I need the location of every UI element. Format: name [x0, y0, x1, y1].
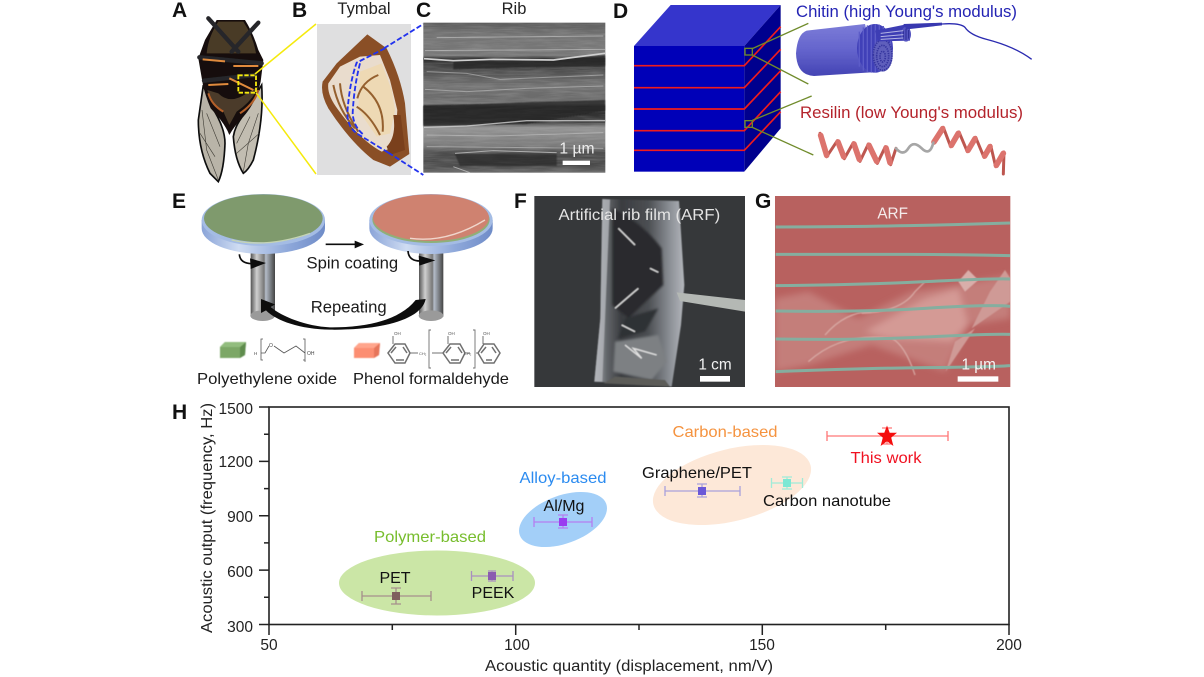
- label: PEEK: PEEK: [472, 585, 515, 602]
- tymbal specimen: [322, 34, 409, 167]
- scale bar: 1 µm: 1 µm: [559, 140, 595, 157]
- group label: carbon-based: Carbon-based: [672, 424, 778, 441]
- icon: cicada body: [198, 18, 263, 135]
- panel labels: D: [613, 0, 628, 23]
- label: phenol formaldehyde: Phenol formaldehyde: [353, 371, 509, 388]
- heading: rib: Rib: [502, 0, 526, 18]
- structural formula: PEO: O: [269, 343, 273, 349]
- scale bar: 1 µm: [559, 140, 595, 165]
- panel B: tymbal photo: [317, 24, 423, 175]
- label: PET: PET: [379, 570, 411, 587]
- y-axis tick labels: 600: [227, 564, 253, 581]
- label: repeating: Repeating: [311, 297, 387, 316]
- right spindle: [419, 248, 443, 321]
- panel H: scatter chart: [199, 401, 1022, 675]
- yellow selection box and zoom lines: [238, 24, 316, 174]
- panel D: layered cube: [634, 5, 813, 172]
- y-axis tick labels: 1200: [219, 454, 253, 471]
- group ellipse: polymer-based: [339, 550, 535, 616]
- panel F: artificial rib film photo: [534, 196, 745, 387]
- data point: PEEK: [472, 571, 513, 581]
- axis ticks: [259, 407, 1009, 635]
- panel labels: G: [755, 190, 771, 213]
- structural formula: phenol formaldehyde: CH₂: [419, 351, 427, 356]
- x-axis tick labels: 200: [996, 637, 1022, 654]
- data point: carbon nanotube: [772, 477, 802, 489]
- x-axis tick labels: 150: [749, 637, 775, 654]
- blue dashed rib outline: [347, 24, 423, 175]
- panel D: chitin fibre: [796, 23, 1032, 76]
- arrow: spin coating: [326, 241, 364, 248]
- dark lamella gaps: [423, 55, 605, 166]
- panel E: spin coating process: [202, 194, 493, 330]
- orange material block: [354, 343, 380, 358]
- group ellipse: alloy-based: [512, 481, 614, 558]
- group label: alloy-based: Alloy-based: [520, 470, 606, 487]
- x-axis title: Acoustic quantity (displacement, nm/V): [485, 658, 773, 675]
- data point: Al/Mg: [534, 515, 592, 528]
- scale bar: 1 cm: [698, 356, 732, 382]
- panel G: ARF SEM image: [775, 196, 1010, 387]
- axes frame: [269, 407, 1009, 624]
- scale bar: 1 µm: [958, 356, 998, 382]
- group ellipse: carbon-based: [645, 430, 819, 540]
- callout lines: [745, 23, 813, 155]
- left disc: polyethylene oxide: [202, 194, 325, 254]
- structural formula: phenol formaldehyde: [388, 330, 500, 368]
- left spindle: [250, 248, 275, 321]
- y-axis tick labels: 900: [227, 509, 253, 526]
- structural formula: phenol formaldehyde: OH: [483, 331, 490, 336]
- structural formula: phenol formaldehyde: OH: [394, 331, 401, 336]
- heading: tymbal: Tymbal: [337, 0, 391, 18]
- structural formula: PEO: OH: [307, 351, 315, 357]
- data point: graphene/PET: [665, 484, 740, 497]
- x-axis tick labels: 50: [260, 637, 278, 654]
- heading: chitin: Chitin (high Young's modulus): [796, 2, 1017, 21]
- label: this work: This work: [850, 450, 923, 467]
- panel labels: H: [172, 401, 187, 424]
- legend: polyethylene oxide: [197, 339, 337, 388]
- PEO layer lines: [776, 223, 1010, 372]
- data point: PET: [362, 588, 431, 604]
- legend: phenol formaldehyde: [353, 330, 509, 388]
- structural formula: PEO: H: [254, 351, 257, 356]
- label: spin coating: Spin coating: [306, 253, 398, 272]
- rotation arrows: [239, 251, 435, 269]
- x-axis tick labels: 100: [504, 637, 530, 654]
- label: ARF: ARF: [877, 205, 908, 222]
- tweezers: [677, 292, 745, 312]
- scale bar: 1 cm: 1 cm: [698, 356, 732, 373]
- scale bar: 1 µm: 1 µm: [961, 356, 996, 373]
- green material block: [220, 342, 246, 358]
- panel labels: F: [514, 190, 527, 213]
- lighter fracture regions: [775, 270, 1010, 375]
- label: graphene/PET: Graphene/PET: [642, 465, 752, 482]
- x-axis tick labels: [260, 637, 1022, 654]
- label: polyethylene oxide: Polyethylene oxide: [197, 371, 337, 388]
- panel C: rib SEM image: [423, 23, 605, 173]
- SEM lamella texture: [423, 23, 605, 173]
- structural formula: phenol formaldehyde: CH₂: [464, 351, 472, 356]
- panel labels: E: [172, 190, 186, 213]
- heading: resilin: Resilin (low Young's modulus): [800, 103, 1023, 122]
- y-axis tick labels: [219, 401, 253, 636]
- structural formula: PEO: [254, 339, 315, 363]
- group label: polymer-based: Polymer-based: [374, 529, 486, 546]
- transparent film: [594, 199, 684, 387]
- label: carbon nanotube: Carbon nanotube: [763, 493, 891, 510]
- icon: cicada wings: [198, 85, 262, 182]
- y-axis tick labels: 300: [227, 619, 253, 636]
- y-axis title: Acoustic output (frequency, Hz): [199, 403, 216, 633]
- structural formula: PEO: n: [304, 359, 306, 363]
- right disc: phenol formaldehyde: [369, 194, 493, 254]
- resilin red layers: [634, 27, 781, 150]
- panel labels: [172, 0, 771, 424]
- label: Al/Mg: Al/Mg: [544, 498, 584, 515]
- arrow: repeating: [261, 299, 426, 330]
- panel D: resilin helix: [820, 127, 1004, 174]
- panel A: cicada photo: [198, 18, 263, 182]
- label: artificial rib film: Artificial rib film (ARF): [558, 207, 720, 224]
- data point: this work star: [827, 426, 948, 446]
- y-axis tick labels: 1500: [219, 401, 253, 418]
- structural formula: phenol formaldehyde: OH: [448, 331, 455, 336]
